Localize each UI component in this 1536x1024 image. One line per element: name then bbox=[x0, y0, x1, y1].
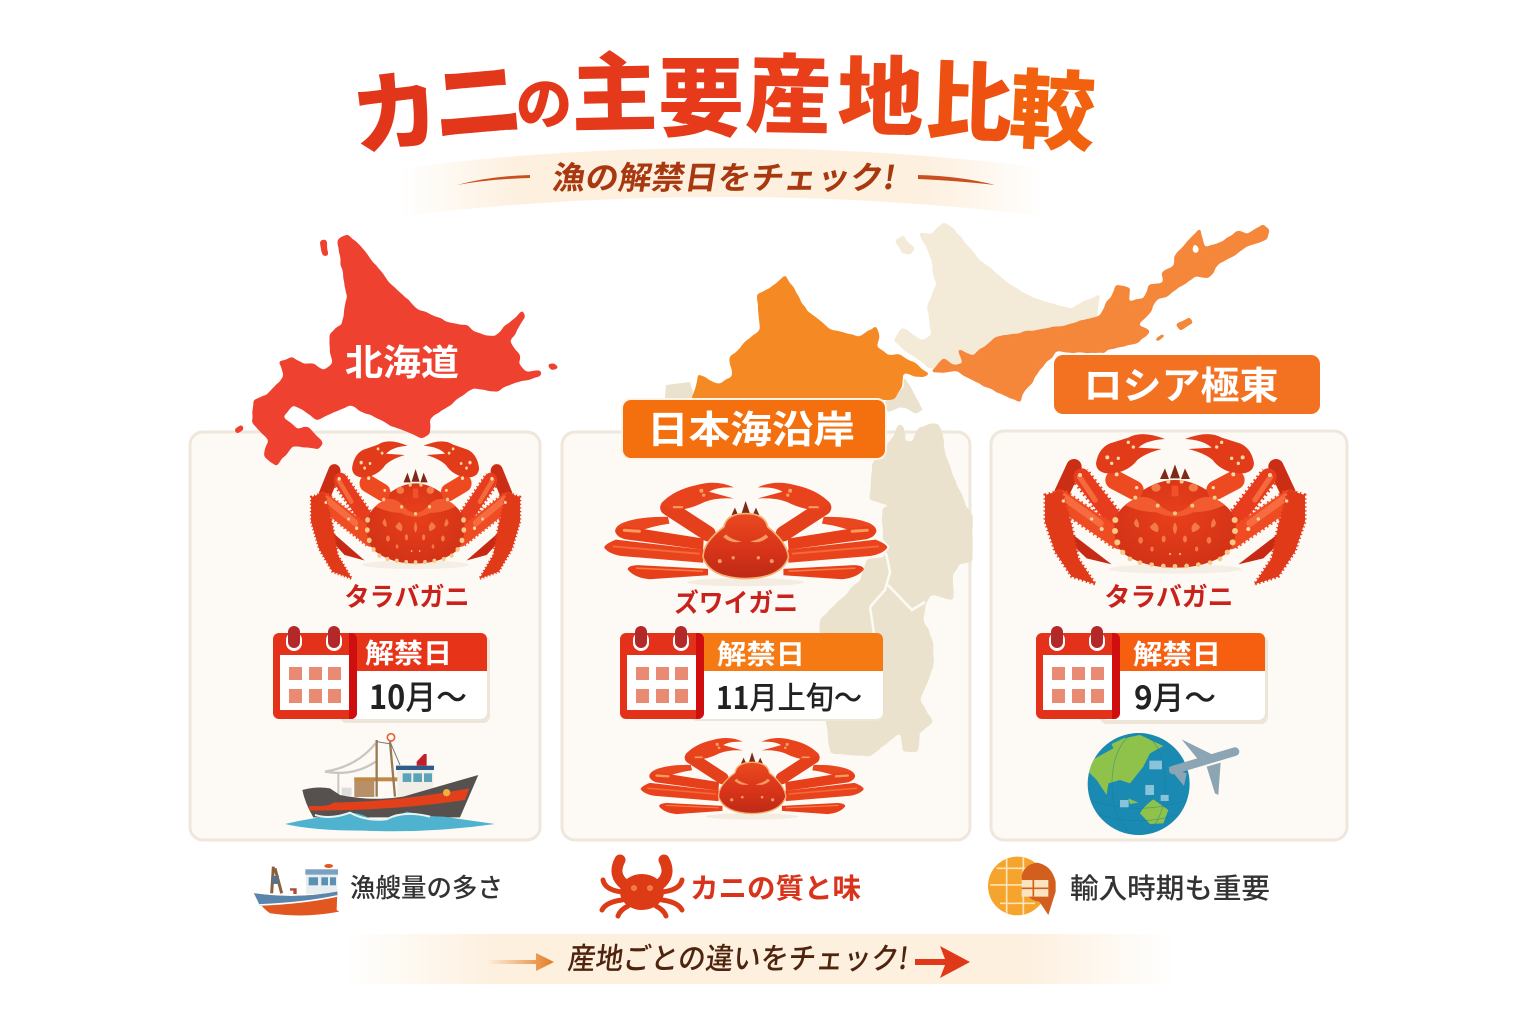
card: Russian Far East bbox=[991, 431, 1347, 840]
subtitle banner bbox=[400, 148, 1045, 216]
arrow: small orange bbox=[487, 953, 554, 971]
badge: Sea of Japan coast: 日本海沿岸 bbox=[647, 399, 855, 454]
title: 地 bbox=[837, 27, 925, 154]
badge: Sea of Japan coast bbox=[622, 399, 886, 459]
date card: Sea of Japan coast: 11月上旬〜 bbox=[716, 673, 862, 718]
crab: Hokkaido king crab bbox=[311, 441, 520, 579]
map: Sea of Japan coast in orange bbox=[692, 275, 930, 400]
date card: Russia bbox=[1036, 626, 1268, 724]
icon: globe and plane bbox=[1087, 733, 1235, 835]
bottom item: catch volume bbox=[254, 864, 503, 915]
title: の bbox=[516, 60, 572, 141]
crab: Russian king crab bbox=[1045, 434, 1305, 584]
title: ニ bbox=[426, 25, 529, 166]
text: quality and taste: カニの質と味 bbox=[690, 867, 861, 907]
crab name: snow crab: ズワイガニ bbox=[674, 583, 798, 620]
text: check differences: 産地ごとの違いをチェック! bbox=[566, 934, 911, 978]
date card: Russia: 解禁日 bbox=[1133, 633, 1221, 672]
crab: snow crab bbox=[604, 483, 887, 586]
title: 要 bbox=[658, 29, 744, 154]
bottom item: import timing bbox=[988, 857, 1270, 915]
title: 比 bbox=[924, 32, 1014, 159]
title: 較 bbox=[1007, 40, 1099, 169]
title bbox=[343, 23, 1099, 175]
label: Hokkaido: 北海道 bbox=[345, 334, 459, 386]
date card: Hokkaido: 解禁日 bbox=[365, 632, 452, 671]
card: Sea of Japan coast bbox=[562, 432, 970, 840]
map: Hokkaido in red bbox=[233, 233, 559, 467]
date card: Hokkaido: 10月〜 bbox=[369, 671, 467, 719]
crab name: Russia: タラバガニ bbox=[1104, 577, 1234, 614]
icon: fishing boat bbox=[285, 734, 495, 831]
subtitle banner: 漁の解禁日をチェック! bbox=[549, 153, 900, 199]
card: Hokkaido bbox=[190, 432, 540, 840]
title: 主 bbox=[570, 23, 658, 150]
date card: Sea of Japan coast bbox=[620, 626, 883, 721]
text: import timing: 輸入時期も重要 bbox=[1070, 867, 1270, 907]
bottom item: quality and taste bbox=[602, 860, 861, 916]
title: 産 bbox=[745, 25, 833, 152]
icon: import globe bbox=[988, 857, 1056, 915]
badge: Russian Far East: ロシア極東 bbox=[1084, 355, 1278, 410]
title: カ bbox=[343, 38, 446, 175]
date card: Hokkaido bbox=[273, 626, 490, 723]
badge: Russian Far East bbox=[1054, 355, 1320, 414]
icon: small boat bbox=[254, 864, 339, 915]
text: catch volume: 漁艘量の多さ bbox=[350, 868, 503, 905]
map: beige Japan background bbox=[665, 223, 1100, 757]
crab name: Hokkaido: タラバガニ bbox=[344, 577, 470, 614]
date card: Russia: 9月〜 bbox=[1134, 673, 1216, 719]
date card: Sea of Japan coast: 解禁日 bbox=[717, 633, 805, 672]
crab: small snow crab bbox=[641, 738, 864, 820]
arrow: large red bbox=[915, 946, 970, 978]
icon: small crab bbox=[602, 860, 682, 916]
bottom banner bbox=[345, 934, 1175, 984]
map: Russian Far East in orange bbox=[930, 224, 1270, 403]
